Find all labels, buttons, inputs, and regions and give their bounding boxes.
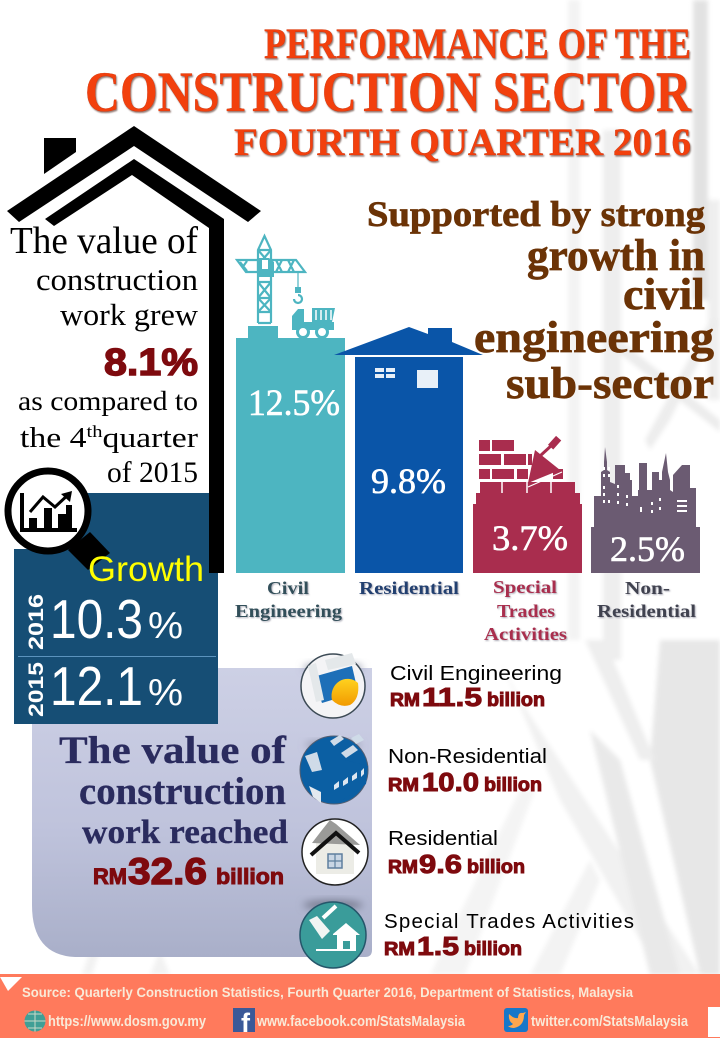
value list: special trades activities: RM xyxy=(384,939,415,959)
panel: growth box: % xyxy=(148,605,183,647)
icon: facebook: f xyxy=(241,1008,251,1038)
value list: civil engineering: 11.5 xyxy=(422,682,482,712)
intro text: value of construction work grew: as compared to xyxy=(18,386,198,416)
panel: value of construction work: billion xyxy=(216,864,284,889)
value list: non-residential: billion xyxy=(484,775,542,796)
intro text: value of construction work grew: the 4 xyxy=(20,423,75,454)
title: FOURTH QUARTER 2016 xyxy=(234,121,691,164)
bar: non-residential: 2.5% xyxy=(610,529,685,569)
value list: residential: billion xyxy=(467,857,525,878)
heading: supported by strong growth: civil xyxy=(623,270,705,319)
category labels: Activities xyxy=(484,624,567,644)
intro text: value of construction work grew: construction xyxy=(36,262,199,297)
bar: special trades activities: 3.7% xyxy=(492,518,568,558)
footer band: www.facebook.com/StatsMalaysia xyxy=(256,1013,466,1030)
intro text: value of construction work grew: work grew xyxy=(60,297,199,332)
bar: non-residential xyxy=(591,447,700,573)
panel: growth box xyxy=(8,471,224,724)
footer band: https://www.dosm.gov.my xyxy=(48,1013,207,1030)
intro text: value of construction work grew: quarter xyxy=(102,423,199,454)
value list: civil engineering: billion xyxy=(487,690,545,711)
panel: value of construction work: The value of xyxy=(59,729,287,772)
icon: magnifying glass with chart xyxy=(8,471,110,570)
footer band xyxy=(0,974,720,1038)
value list: special trades activities: 1.5 xyxy=(417,931,459,961)
icon: globe xyxy=(24,1010,46,1032)
value list: non-residential: RM xyxy=(388,775,419,795)
value list: residential: 9.6 xyxy=(419,849,462,879)
intro text: value of construction work grew: of 2015 xyxy=(107,456,198,489)
icon: facebook xyxy=(233,1008,255,1038)
bar: special trades activities xyxy=(473,436,582,573)
bar: residential: 9.8% xyxy=(371,461,446,501)
value list: special trades activities: Special Trades Activities xyxy=(384,910,634,933)
value list: non-residential xyxy=(388,745,547,797)
bar: civil engineering xyxy=(236,236,345,573)
panel: value of construction work: construction xyxy=(79,770,286,813)
heading: supported by strong growth: sub-sector xyxy=(506,359,714,408)
category labels: Residential xyxy=(597,601,696,621)
category labels: Trades xyxy=(497,601,555,621)
icon: twitter xyxy=(504,1008,528,1032)
heading: supported by strong growth: Supported by strong xyxy=(367,194,705,234)
intro text: value of construction work grew: th xyxy=(87,422,103,441)
footer band: twitter.com/StatsMalaysia xyxy=(531,1013,689,1030)
value list: non-residential: Non-Residential xyxy=(388,745,547,768)
panel: growth box: 12.1 xyxy=(50,655,143,717)
panel: value of construction work: RM xyxy=(93,864,127,889)
panel: growth box: Growth xyxy=(88,550,204,589)
category labels: Residential xyxy=(359,578,459,598)
heading: supported by strong growth xyxy=(367,194,714,408)
panel: growth box: 2016 xyxy=(25,594,48,650)
value list: civil engineering: Civil Engineering xyxy=(390,662,562,685)
bar: residential xyxy=(334,327,483,573)
icon: house xyxy=(302,819,368,885)
value list: special trades activities: billion xyxy=(464,939,522,960)
category labels: Engineering xyxy=(235,601,342,621)
category labels: Non- xyxy=(625,578,670,598)
value list: civil engineering xyxy=(390,662,562,712)
icon: blueprint and helmet xyxy=(301,653,365,718)
panel: growth box: 10.3 xyxy=(50,588,143,650)
category labels xyxy=(235,577,696,644)
bar: civil engineering: 12.5% xyxy=(248,383,340,424)
value list: residential: Residential xyxy=(388,827,498,850)
icon: factory xyxy=(300,734,368,804)
panel: value of construction work: work reached xyxy=(82,814,288,851)
value list: civil engineering: RM xyxy=(390,690,420,710)
value list: residential xyxy=(388,827,525,879)
bar chart: growth by sub-sector xyxy=(236,236,700,573)
value list: residential: RM xyxy=(388,857,418,877)
icon: special trades xyxy=(300,900,366,968)
heading: supported by strong growth: engineering xyxy=(474,313,714,362)
category labels: Special xyxy=(493,577,557,597)
intro text: value of construction work grew: 8.1% xyxy=(104,342,198,384)
heading: supported by strong growth: growth in xyxy=(527,231,705,280)
house outline icon xyxy=(7,126,261,573)
value list: special trades activities xyxy=(384,910,634,961)
title xyxy=(85,21,692,164)
value list: non-residential: 10.0 xyxy=(422,767,479,797)
intro text: value of construction work grew: The value of xyxy=(10,220,198,262)
panel: value of construction work: 32.6 xyxy=(128,851,207,892)
footer band: Source: Quarterly Construction Statistics, Fourth Quarter 2016, Department of Statistics, Malaysia xyxy=(22,984,633,1000)
category labels: Civil xyxy=(267,578,309,598)
panel: growth box: 2015 xyxy=(25,662,48,717)
intro text: value of construction work grew xyxy=(10,220,199,489)
panel: value of construction work xyxy=(32,668,372,957)
panel: growth box: % xyxy=(148,672,183,714)
